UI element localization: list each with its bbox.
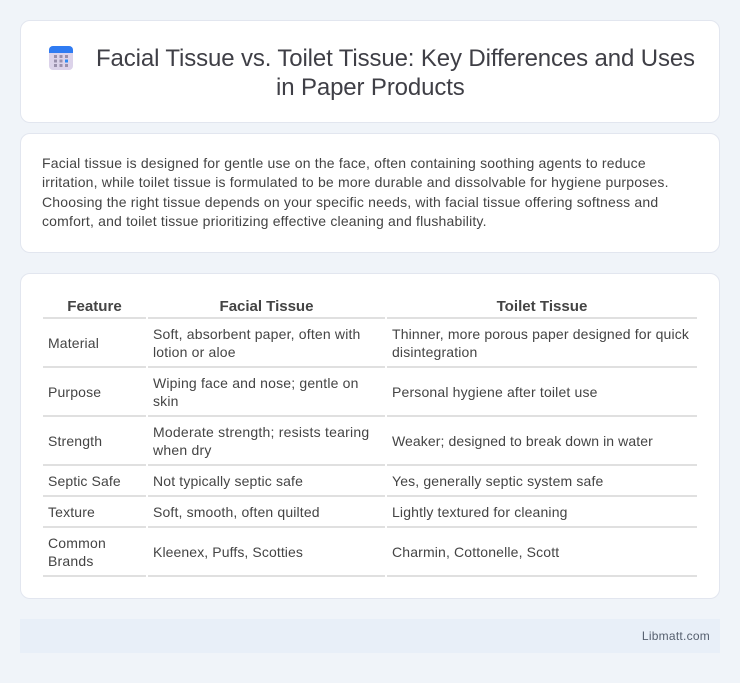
- row: Common Brands: Brands: [48, 553, 94, 569]
- table: Kleenex, Puffs, Scotties: [153, 544, 303, 560]
- intro paragraph: comfort, and toilet tissue prioritizing effective cleaning and flushability.: [42, 213, 487, 229]
- row: Common Brands: Common: [48, 535, 106, 551]
- row: Septic Safe: Septic Safe: [48, 473, 121, 489]
- intro paragraph: [42, 155, 669, 229]
- icon: calendar: [49, 46, 73, 70]
- title: [96, 45, 695, 101]
- table: Personal hygiene after toilet use: [392, 384, 598, 400]
- intro paragraph: Facial tissue is designed for gentle use on the face, often containing soothing agents to reduce: [42, 155, 646, 171]
- table: disintegration: [392, 344, 477, 360]
- table: Thinner, more porous paper designed for quick: [392, 326, 689, 342]
- intro paragraph: Choosing the right tissue depends on your specific needs, with facial tissue offering softness and: [42, 194, 658, 210]
- table: lotion or aloe: [153, 344, 236, 360]
- row: Texture: Texture: [48, 504, 95, 520]
- table: Moderate strength; resists tearing: [153, 424, 369, 440]
- row: Strength: Strength: [48, 433, 102, 449]
- footer bar: [20, 619, 720, 653]
- table: Weaker; designed to break down in water: [392, 433, 653, 449]
- table: Soft, smooth, often quilted: [153, 504, 320, 520]
- row: Common Brands: [48, 535, 106, 569]
- table: Not typically septic safe: [153, 473, 303, 489]
- table: Charmin, Cottonelle, Scott: [392, 544, 559, 560]
- table: when dry: [153, 442, 212, 458]
- header card: [20, 20, 720, 123]
- intro card: [20, 133, 720, 253]
- title: in Paper Products: [276, 74, 465, 101]
- table: Wiping face and nose; gentle on: [153, 375, 359, 391]
- intro paragraph: irritation, while toilet tissue is formulated to be more durable and dissolvable for hygiene purposes.: [42, 174, 669, 190]
- row: Purpose: Purpose: [48, 384, 101, 400]
- header: Facial Tissue: Facial Tissue: [220, 298, 313, 315]
- header: Toilet Tissue: Toilet Tissue: [497, 298, 587, 315]
- table: Lightly textured for cleaning: [392, 504, 568, 520]
- footer text: Libmatt.com: [642, 629, 710, 643]
- header: Feature: Feature: [67, 298, 122, 315]
- table: Yes, generally septic system safe: [392, 473, 603, 489]
- title: Facial Tissue vs. Toilet Tissue: Key Differences and Uses: [96, 45, 695, 72]
- row: Material: Material: [48, 335, 99, 351]
- table: Soft, absorbent paper, often with: [153, 326, 361, 342]
- table: skin: [153, 393, 179, 409]
- table card: [20, 273, 720, 599]
